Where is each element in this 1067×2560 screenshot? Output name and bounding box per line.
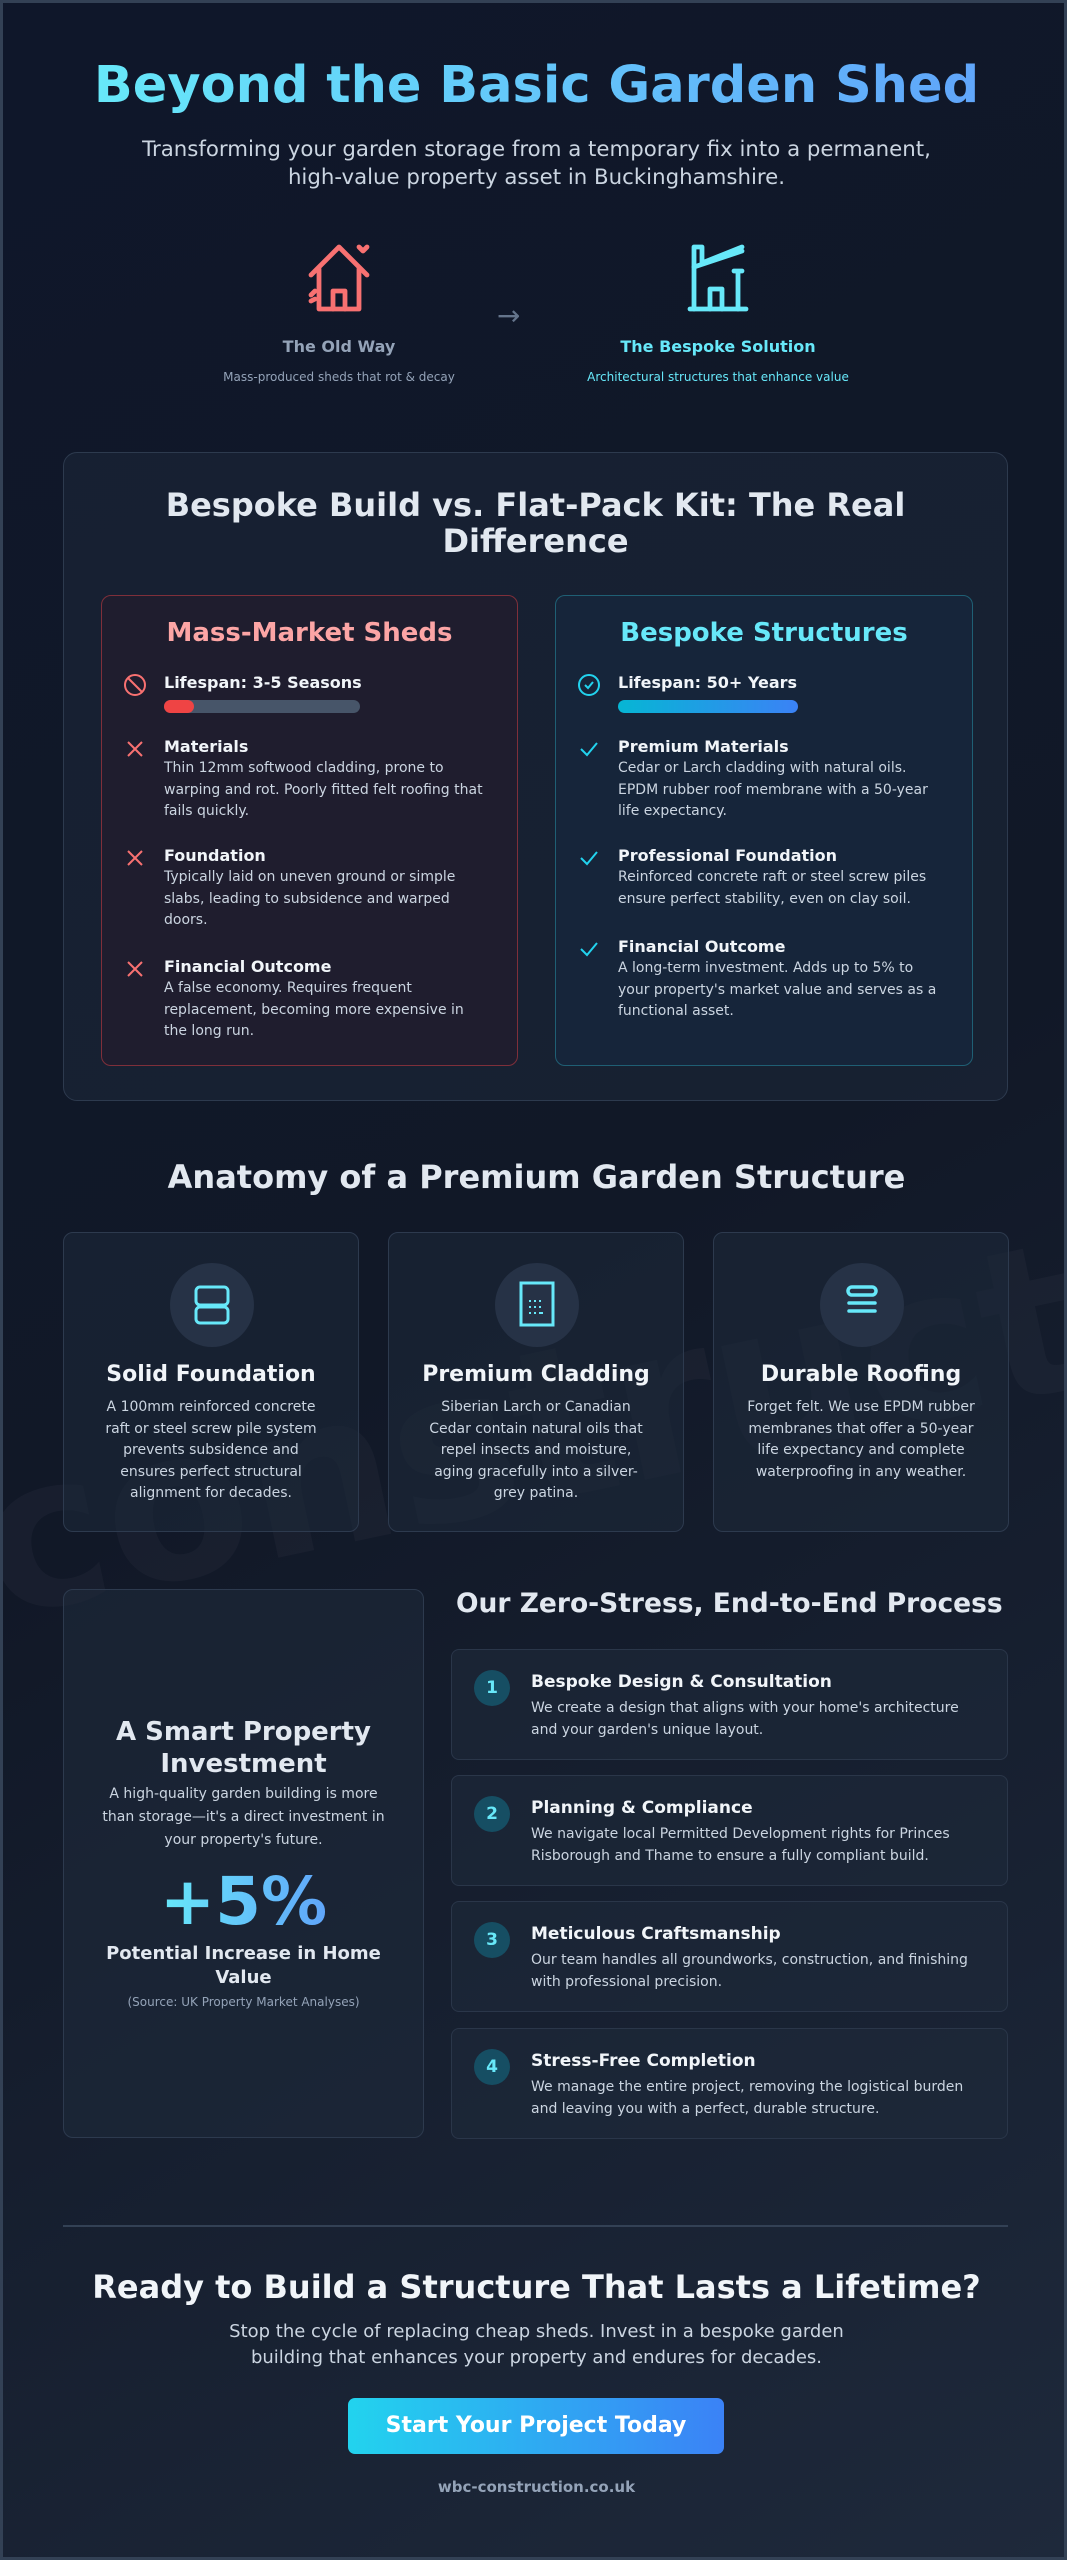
panel heading [166, 486, 905, 560]
icon: architectural house [688, 244, 748, 312]
item: financial: A false economy. Requires frequent replacement, becoming more expensive in the long run. [164, 980, 464, 1039]
step 1: 1 [486, 1678, 498, 1698]
comparison: bespoke [587, 244, 849, 384]
subtitle [142, 137, 931, 190]
step 4 [451, 2028, 1008, 2139]
stat: +5% [160, 1863, 327, 1940]
item: financial: Financial Outcome [618, 937, 785, 956]
item: foundation [127, 846, 455, 928]
item: foundation: Reinforced concrete raft or steel screw piles ensure perfect stability, even on clay soil. [618, 869, 926, 906]
heading: process: Our Zero-Stress, End-to-End Process [456, 1588, 1003, 1619]
item: financial [127, 957, 464, 1039]
panel heading: Bespoke Build vs. Flat-Pack Kit: The Real [166, 486, 905, 524]
item: lifespan: Lifespan: 50+ Years [618, 673, 797, 692]
step 3: Meticulous Craftsmanship [531, 1924, 781, 1944]
item: materials: Thin 12mm softwood cladding, prone to warping and rot. Poorly fitted felt roofing that fails quickly. [164, 760, 483, 819]
stat label: Potential Increase in Home Value [106, 1943, 381, 1988]
card: bespoke [555, 595, 973, 1066]
panel: build vs kit [63, 452, 1008, 1101]
icon: foundation [170, 1263, 254, 1347]
step 1: We create a design that aligns with your home's architecture and your garden's unique layout. [531, 1700, 959, 1738]
item: materials [580, 737, 928, 819]
card: foundation: Solid Foundation [106, 1362, 316, 1387]
arrow: → [497, 299, 520, 332]
item: foundation: Professional Foundation [618, 846, 837, 865]
card heading: Mass-Market Sheds [166, 618, 453, 648]
step 3 [451, 1901, 1008, 2012]
step 2: Planning & Compliance [531, 1798, 753, 1818]
card: roofing: Durable Roofing [761, 1362, 961, 1387]
item: financial: Financial Outcome [164, 957, 331, 976]
item: financial: A long-term investment. Adds up to 5% to your property's market value and serves as a functional asset. [618, 960, 936, 1019]
step 2: 2 [486, 1804, 498, 1824]
step 4: We manage the entire project, removing the logistical burden and leaving you with a perfect, durable structure. [531, 2079, 963, 2117]
card: roofing [713, 1232, 1009, 1532]
item: lifespan [124, 673, 362, 713]
heading: A Smart Property [116, 1717, 371, 1747]
step 2 [451, 1775, 1008, 1886]
source: (Source: UK Property Market Analyses) [127, 1995, 360, 2009]
card: foundation: A 100mm reinforced concrete raft or steel screw pile system prevents subsidence and ensures perfect structural alignment for decades. [105, 1399, 317, 1501]
card heading: Bespoke Structures [620, 618, 908, 648]
comparison: old way: Mass-produced sheds that rot & decay [223, 370, 455, 384]
heading [116, 1717, 371, 1779]
step 1 [451, 1649, 1008, 1760]
item: foundation [580, 846, 926, 906]
subtitle: Transforming your garden storage from a temporary fix into a permanent, [142, 137, 931, 162]
step 2: We navigate local Permitted Development rights for Princes Risborough and Thame to ensure a fully compliant build. [531, 1826, 950, 1864]
button [348, 2398, 724, 2454]
item: foundation: Typically laid on uneven ground or simple slabs, leading to subsidence and warped doors. [164, 869, 455, 928]
subtitle: high-value property asset in Buckinghamshire. [288, 165, 785, 190]
comparison: old way [223, 244, 455, 384]
heading: Investment [160, 1749, 327, 1779]
item: foundation: Foundation [164, 846, 266, 865]
step 4: Stress-Free Completion [531, 2051, 756, 2071]
text: A high-quality garden building is more than storage—it's a direct investment in your property's future. [102, 1786, 385, 1848]
card: mass market [101, 595, 518, 1066]
item: lifespan [578, 673, 798, 713]
item: materials [127, 737, 483, 819]
icon: cladding [495, 1263, 579, 1347]
icon: decaying house [308, 244, 370, 312]
card: cladding: Premium Cladding [422, 1362, 650, 1387]
step 3: Our team handles all groundworks, construction, and finishing with professional precision. [531, 1952, 968, 1990]
cta heading: Ready to Build a Structure That Lasts a Lifetime? [92, 2268, 981, 2306]
comparison: old way: The Old Way [283, 337, 395, 356]
heading: anatomy: Anatomy of a Premium Garden Structure [168, 1158, 905, 1196]
comparison: bespoke: Architectural structures that enhance value [587, 370, 849, 384]
cta text: Stop the cycle of replacing cheap sheds. Invest in a bespoke garden building that enhances your property and endures for decades. [229, 2321, 844, 2368]
icon: roofing [820, 1263, 904, 1347]
item: materials: Premium Materials [618, 737, 789, 756]
card: roofing: Forget felt. We use EPDM rubber membranes that offer a 50-year life expectancy and complete waterproofing in any weather. [747, 1399, 975, 1480]
panel heading: Difference [442, 522, 629, 560]
step 1: Bespoke Design & Consultation [531, 1672, 832, 1692]
card: cladding [388, 1232, 684, 1532]
step 4: 4 [486, 2057, 498, 2077]
card: cladding: Siberian Larch or Canadian Cedar contain natural oils that repel insects and moisture, aging gracefully into a silver-grey patina. [429, 1399, 643, 1501]
panel: investment [63, 1589, 424, 2138]
card: foundation [63, 1232, 359, 1532]
button: Start Your Project Today [386, 2413, 686, 2438]
footer url: wbc-construction.co.uk [438, 2478, 635, 2496]
item: materials: Cedar or Larch cladding with natural oils. EPDM rubber roof membrane with a 50-year life expectancy. [618, 760, 928, 819]
item: materials: Materials [164, 737, 248, 756]
step 3: 3 [486, 1930, 498, 1950]
comparison: bespoke: The Bespoke Solution [620, 337, 816, 356]
title: Beyond the Basic Garden Shed [94, 56, 979, 115]
item: lifespan: Lifespan: 3-5 Seasons [164, 673, 362, 692]
item: financial [580, 937, 936, 1019]
